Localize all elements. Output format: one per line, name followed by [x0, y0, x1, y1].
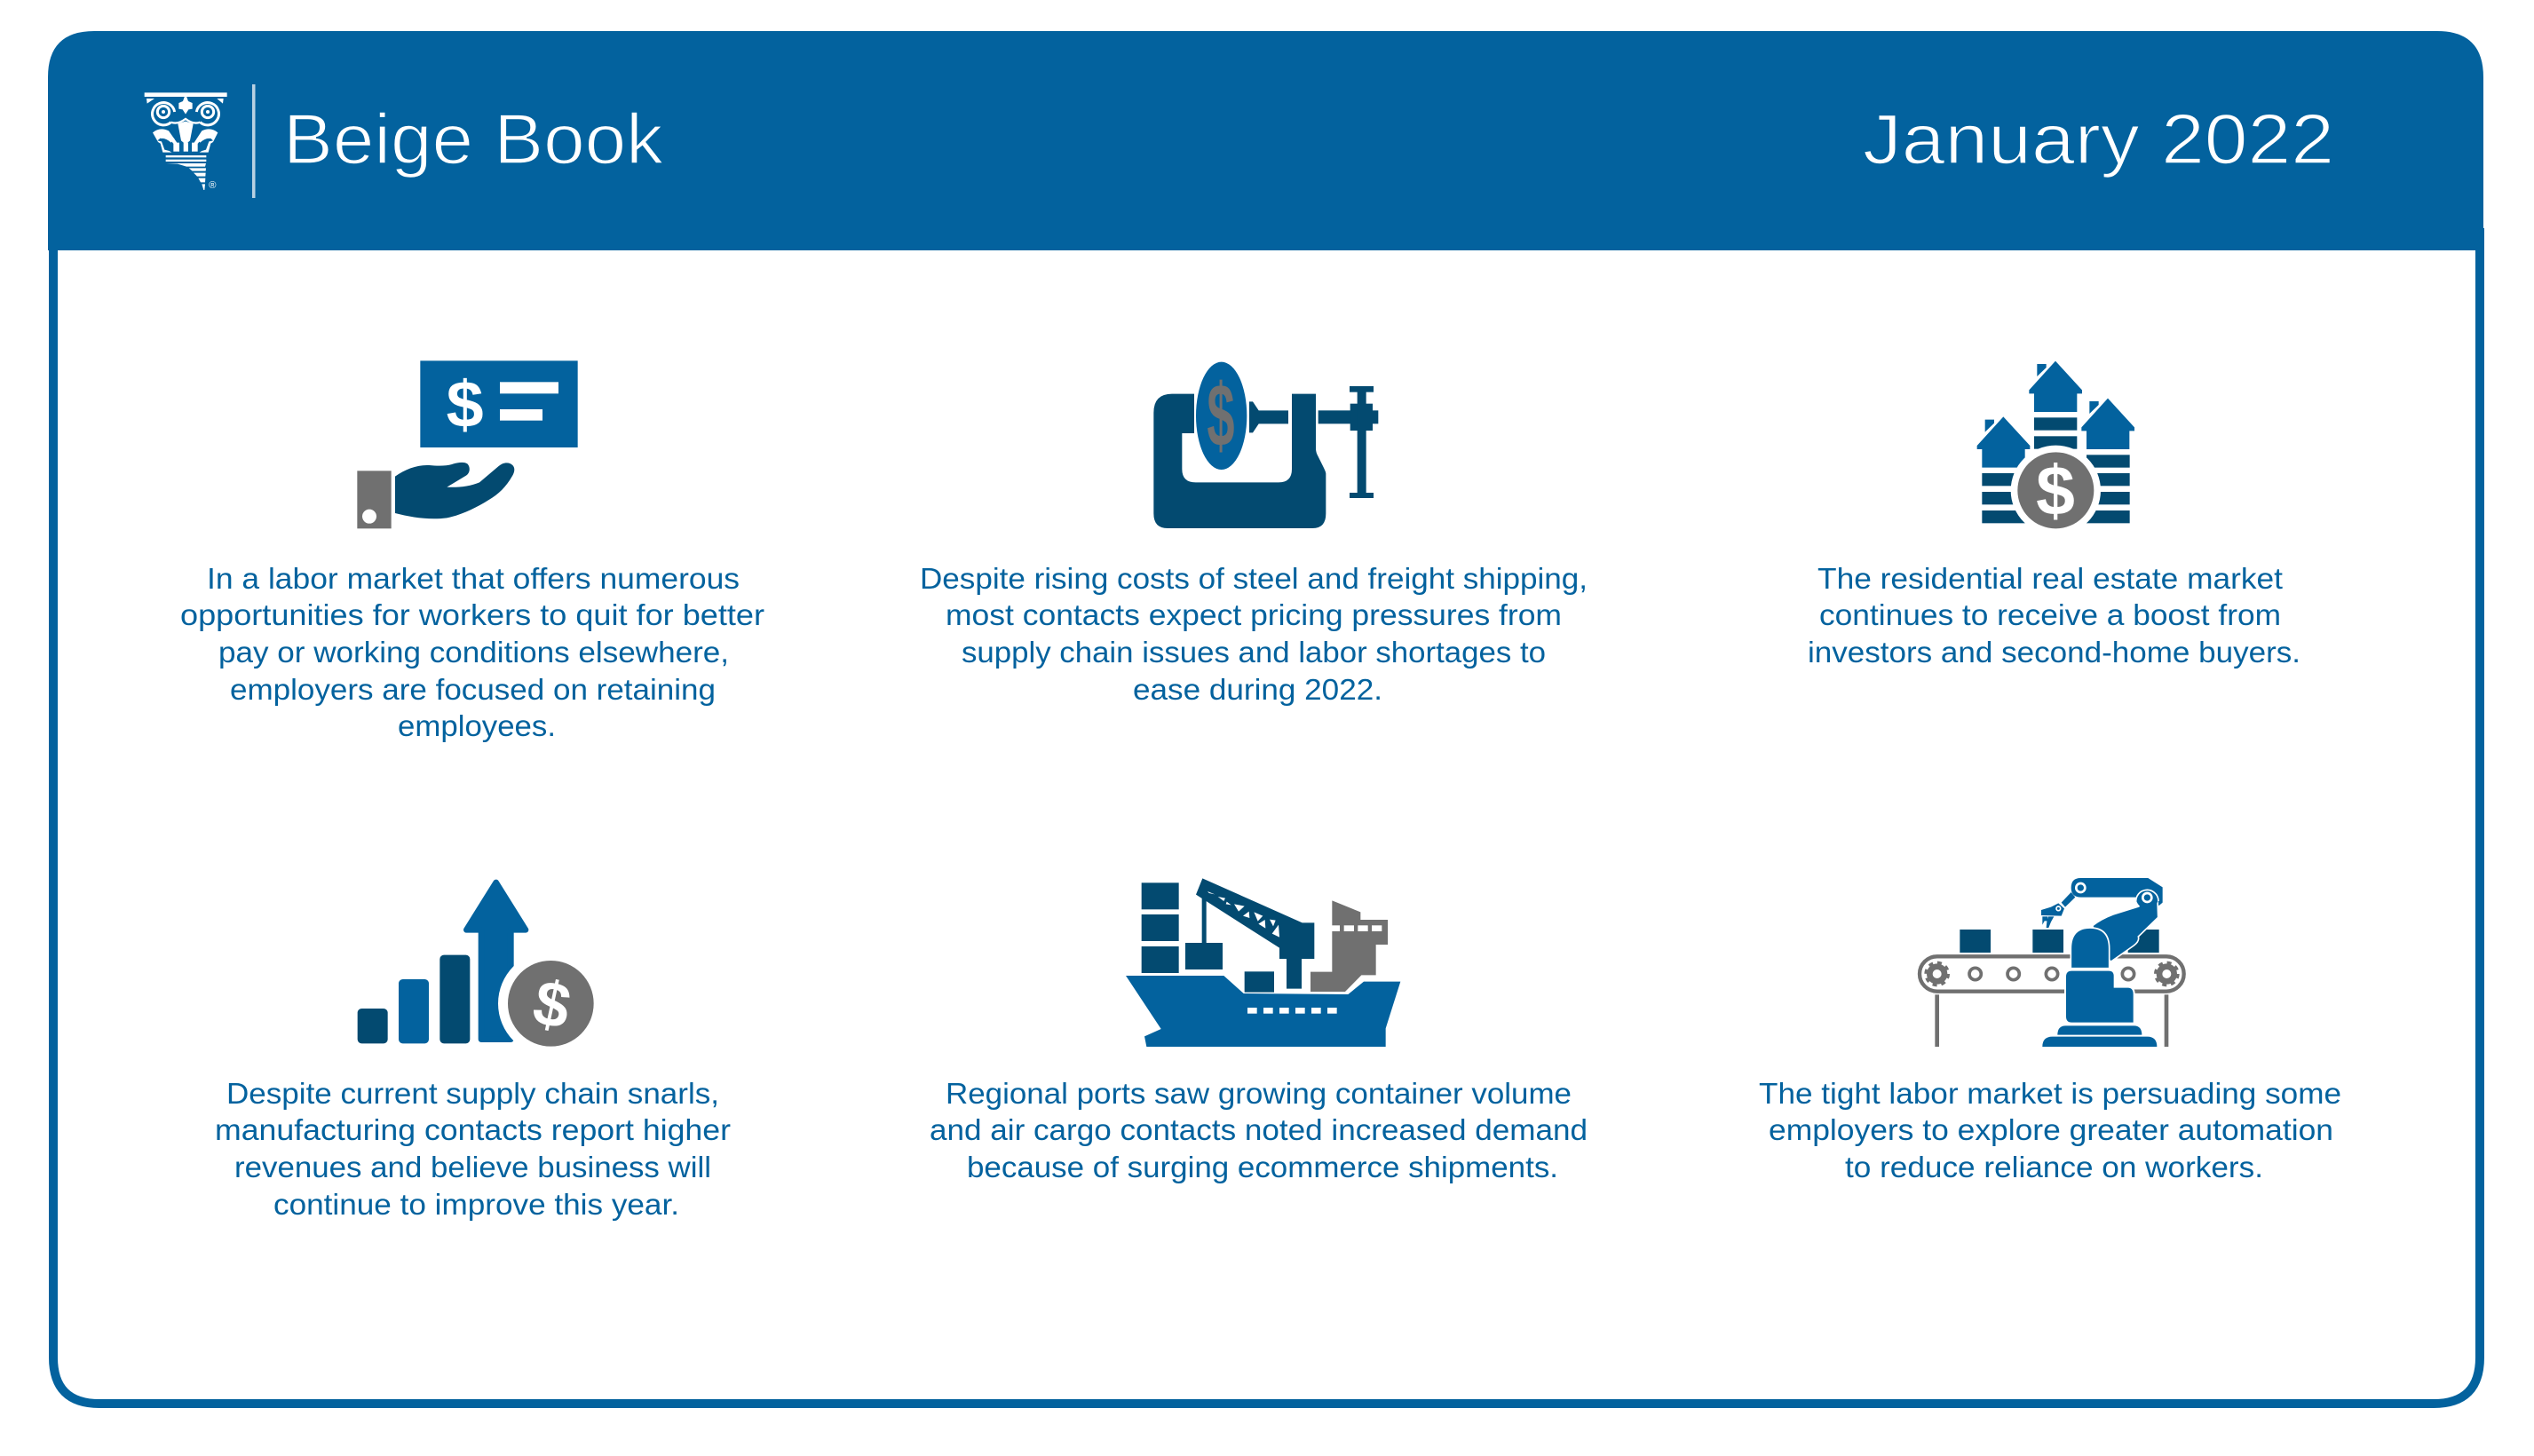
text: pricing pressures [920, 562, 1588, 706]
icon: rising bars with arrow and coin [358, 882, 604, 1056]
icon: clamp squeezing dollar: $ [1207, 367, 1235, 465]
text: pricing pressures: Despite rising costs of steel and freight shipping, [920, 562, 1588, 595]
icon: container ship with crane [1126, 878, 1400, 1047]
logo: Corinthian column capital: ® [209, 180, 217, 191]
title: Beige Book [283, 99, 664, 178]
text: ports and air cargo: because of surging ecommerce shipments. [967, 1151, 1558, 1183]
panel: ports and air cargo [930, 878, 1588, 1183]
text: pricing pressures: supply chain issues and labor shortages to [962, 636, 1546, 669]
text: residential real estate: The residential real estate market [1817, 562, 2283, 595]
text: retaining employees: opportunities for workers to quit for better [180, 598, 764, 631]
icon: houses on coin stacks: $ [2036, 451, 2075, 529]
panel: pricing pressures [920, 360, 1588, 706]
text: residential real estate [1808, 562, 2300, 669]
date: January 2022 [1863, 99, 2334, 178]
text: pricing pressures: ease during 2022. [1133, 673, 1382, 706]
text: retaining employees: employees. [398, 709, 556, 742]
text: automation: employers to explore greater automation [1769, 1113, 2333, 1146]
icon: rising bars with arrow and coin: $ [527, 967, 576, 1043]
panel: content frame [53, 228, 2480, 1404]
text: manufacturing revenues: manufacturing contacts report higher [215, 1113, 731, 1146]
text: automation: The tight labor market is persuading some [1759, 1077, 2341, 1110]
icon: hand holding check [357, 360, 578, 528]
text: ports and air cargo [930, 1077, 1588, 1183]
text: ports and air cargo: Regional ports saw growing container volume [946, 1077, 1572, 1110]
panel: automation [1759, 878, 2341, 1183]
icon: houses on coin stacks [1977, 361, 2134, 535]
panel: manufacturing revenues [215, 882, 731, 1221]
text: manufacturing revenues [215, 1077, 731, 1221]
text: manufacturing revenues: Despite current supply chain snarls, [226, 1077, 719, 1110]
logo: Corinthian column capital [145, 92, 227, 191]
text: retaining employees: employers are focused on retaining [230, 673, 716, 706]
text: manufacturing revenues: continue to improve this year. [273, 1188, 679, 1221]
text: pricing pressures: most contacts expect pricing pressures from [946, 598, 1562, 631]
text: automation: to reduce reliance on workers. [1845, 1151, 2263, 1183]
text: residential real estate: continues to receive a boost from [1819, 598, 2281, 631]
text: retaining employees [180, 562, 764, 742]
text: retaining employees: In a labor market that offers numerous [207, 562, 740, 595]
panel: retaining employees [180, 360, 764, 742]
icon: hand holding check: $ [447, 368, 484, 441]
icon: clamp squeezing dollar [1153, 360, 1378, 528]
panel: residential real estate [1808, 361, 2300, 669]
icon: robot arm on conveyor belt [1920, 878, 2184, 1047]
text: residential real estate: investors and second-home buyers. [1808, 636, 2300, 669]
header divider [252, 84, 256, 198]
text: retaining employees: pay or working conditions elsewhere, [218, 636, 729, 669]
text: manufacturing revenues: revenues and believe business will [234, 1151, 711, 1183]
header band [48, 31, 2484, 250]
text: ports and air cargo: and air cargo contacts noted increased demand [930, 1113, 1588, 1146]
text: automation [1759, 1077, 2341, 1183]
